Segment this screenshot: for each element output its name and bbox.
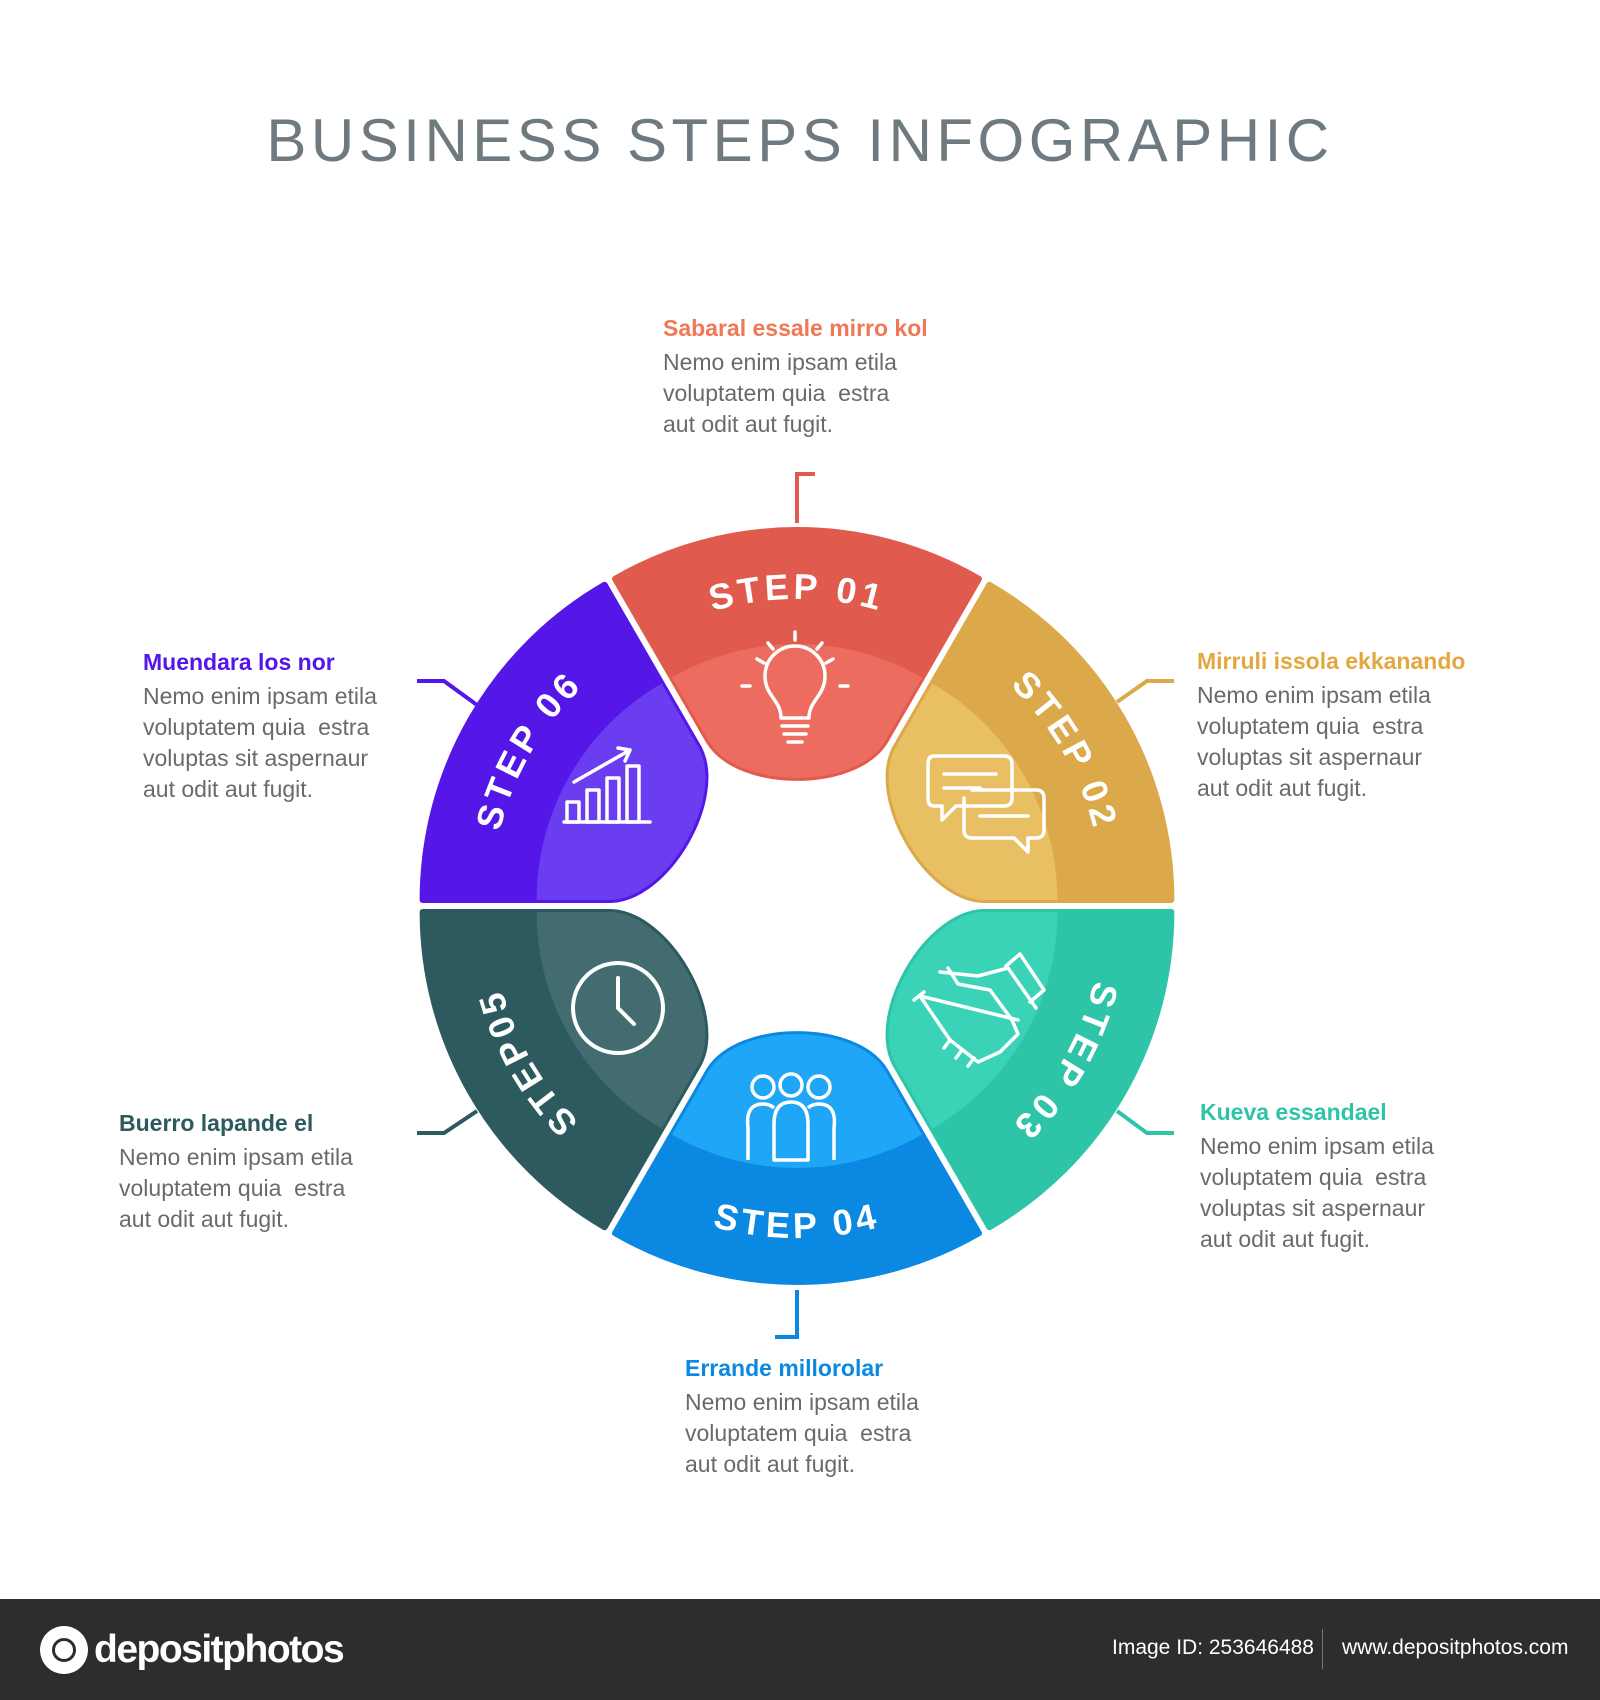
- text: step 02: Mirruli issola ekkanando: [1197, 648, 1465, 674]
- icon: light bulb: [742, 632, 848, 742]
- wheel diagram: [417, 472, 1174, 1339]
- text: step 01: Sabaral essale mirro kol: [663, 315, 928, 341]
- segment: step 01: [612, 527, 982, 781]
- text: step 05: Nemo enim ipsam etila: [119, 1144, 353, 1170]
- text: step 03: [1200, 1099, 1434, 1252]
- segment: step 03: STEP 03: [1016, 982, 1116, 1138]
- footer image id: Image ID: 253646488: [1112, 1636, 1314, 1659]
- text: step 03: Kueva essandael: [1200, 1099, 1387, 1125]
- connector: step 01: [797, 474, 815, 523]
- text: step 06: Muendara los nor: [143, 649, 335, 675]
- segment: step 01: STEP 01: [710, 574, 878, 610]
- icon: growth chart: [564, 748, 650, 822]
- text: step 05: [119, 1110, 353, 1232]
- segment: step 06: [420, 582, 708, 903]
- segment: step 05: STEP05: [479, 993, 576, 1135]
- icon: chat bubbles: [928, 756, 1044, 852]
- connector: step 03: [1117, 1111, 1174, 1133]
- text: step 06: voluptatem quia estra: [143, 714, 369, 740]
- segment: step 06: STEP 06: [478, 674, 578, 830]
- text: step 04: Nemo enim ipsam etila: [685, 1389, 919, 1415]
- text: step 02: Nemo enim ipsam etila: [1197, 682, 1431, 708]
- footer bar: [0, 1599, 1600, 1700]
- footer url: www.depositphotos.com: [1342, 1636, 1568, 1659]
- text: step 04: Errande millorolar: [685, 1355, 883, 1381]
- icon: team: [748, 1074, 834, 1160]
- text: step 02: voluptas sit aspernaur: [1197, 744, 1422, 770]
- text: step 01: voluptatem quia estra: [663, 380, 889, 406]
- segment: step 02: STEP 02: [1014, 672, 1116, 827]
- connector: step 06: [417, 681, 477, 705]
- segment: step 02: [886, 582, 1174, 903]
- text: step 06: aut odit aut fugit.: [143, 776, 313, 802]
- text: step 05: aut odit aut fugit.: [119, 1206, 289, 1232]
- text: step 06: [143, 649, 377, 802]
- text: step 04: voluptatem quia estra: [685, 1420, 911, 1446]
- text: step 04: aut odit aut fugit.: [685, 1451, 855, 1477]
- icon: clock: [573, 963, 663, 1053]
- text: step 05: voluptatem quia estra: [119, 1175, 345, 1201]
- text: step 02: voluptatem quia estra: [1197, 713, 1423, 739]
- text: step 01: Nemo enim ipsam etila: [663, 349, 897, 375]
- connector: step 05: [417, 1111, 477, 1133]
- text: step 03: Nemo enim ipsam etila: [1200, 1133, 1434, 1159]
- text: step 02: aut odit aut fugit.: [1197, 775, 1367, 801]
- text: step 03: voluptatem quia estra: [1200, 1164, 1426, 1190]
- text: step 03: aut odit aut fugit.: [1200, 1226, 1370, 1252]
- text: step 01: aut odit aut fugit.: [663, 411, 833, 437]
- text: step 06: voluptas sit aspernaur: [143, 745, 368, 771]
- text: step 02: [1197, 648, 1465, 801]
- text: step 03: voluptas sit aspernaur: [1200, 1195, 1425, 1221]
- text: step 06: Nemo enim ipsam etila: [143, 683, 377, 709]
- icon: handshake: [914, 954, 1044, 1066]
- segment: step 05: [420, 909, 708, 1230]
- title: BUSINESS STEPS INFOGRAPHIC: [266, 107, 1334, 174]
- footer logo: depositphotos: [94, 1628, 343, 1671]
- text: step 01: [663, 315, 928, 437]
- connector: step 04: [775, 1290, 797, 1337]
- text: step 04: [685, 1355, 919, 1477]
- connector: step 02: [1117, 681, 1174, 702]
- segment: step 03: [886, 909, 1174, 1230]
- segment: step 04: STEP 04: [714, 1204, 876, 1238]
- text: step 05: Buerro lapande el: [119, 1110, 313, 1136]
- segment: step 04: [612, 1031, 982, 1285]
